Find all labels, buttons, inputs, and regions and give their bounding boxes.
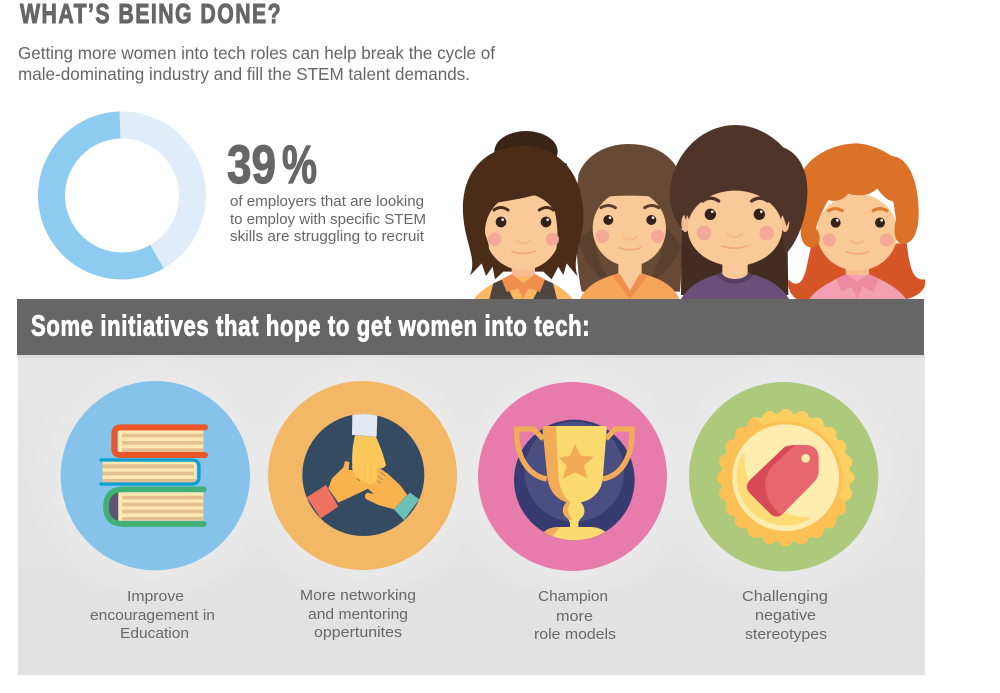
label: stereotypes: Challenging bbox=[742, 588, 828, 605]
statistic: 39%: % bbox=[282, 135, 317, 195]
illustration: four women bbox=[463, 125, 925, 299]
statistic description: of employers that are looking bbox=[230, 194, 424, 210]
left hand bbox=[328, 461, 372, 503]
label: stereotypes: stereotypes bbox=[745, 626, 827, 643]
label: role models bbox=[534, 588, 616, 643]
sleeve bbox=[352, 414, 377, 437]
label: role models: role models bbox=[534, 626, 616, 643]
left cuff bbox=[307, 485, 338, 518]
label: role models: Champion bbox=[538, 588, 608, 605]
top hand bbox=[352, 435, 386, 484]
label: networking bbox=[300, 587, 416, 641]
intro text: male-dominating industry and fill the STEM talent demands. bbox=[18, 64, 470, 84]
label: networking: and mentoring bbox=[308, 606, 408, 623]
label: networking: More networking bbox=[300, 587, 416, 604]
label: education bbox=[90, 588, 215, 642]
price tag bbox=[747, 445, 819, 517]
donut chart: 39% bbox=[52, 125, 192, 266]
intro text: Getting more women into tech roles can help break the cycle of bbox=[18, 43, 495, 63]
woman 2 bbox=[576, 144, 682, 299]
label: education: Improve bbox=[127, 588, 184, 605]
label: stereotypes: negative bbox=[755, 607, 816, 624]
icon: joined hands on orange circle bbox=[268, 381, 457, 570]
label: education: encouragement in bbox=[90, 607, 215, 624]
statistic: 39% bbox=[227, 135, 317, 195]
banner heading bbox=[17, 299, 924, 355]
right hand bbox=[363, 465, 407, 509]
trophy base bbox=[544, 527, 605, 540]
label: stereotypes bbox=[742, 588, 828, 643]
statistic description bbox=[230, 194, 426, 245]
blue book bbox=[101, 460, 199, 484]
icon: books on blue circle bbox=[61, 381, 250, 570]
trophy cup bbox=[543, 426, 607, 528]
statistic description: skills are struggling to recruit bbox=[230, 229, 424, 245]
label: role models: more bbox=[556, 608, 593, 625]
statistic description: to employ with specific STEM bbox=[230, 212, 426, 228]
icon: trophy on pink circle bbox=[478, 382, 667, 571]
green book bbox=[106, 489, 204, 524]
finger lines bbox=[357, 472, 385, 483]
icon: price tag badge on green circle bbox=[689, 382, 878, 571]
star bbox=[558, 444, 594, 479]
scalloped badge bbox=[721, 413, 850, 542]
woman 1 bbox=[463, 131, 583, 299]
statistic: 39%: 39 bbox=[227, 135, 276, 195]
intro text bbox=[18, 43, 495, 84]
banner heading: Some initiatives that hope to get women into tech: bbox=[31, 311, 590, 342]
trophy handles bbox=[517, 429, 632, 479]
panel: initiatives background bbox=[18, 346, 925, 675]
label: networking: oppertunites bbox=[314, 624, 402, 641]
right cuff bbox=[394, 493, 419, 520]
label: education: Education bbox=[120, 625, 189, 642]
red book bbox=[114, 427, 205, 455]
woman 3 bbox=[670, 125, 807, 299]
woman 4 bbox=[788, 143, 925, 299]
